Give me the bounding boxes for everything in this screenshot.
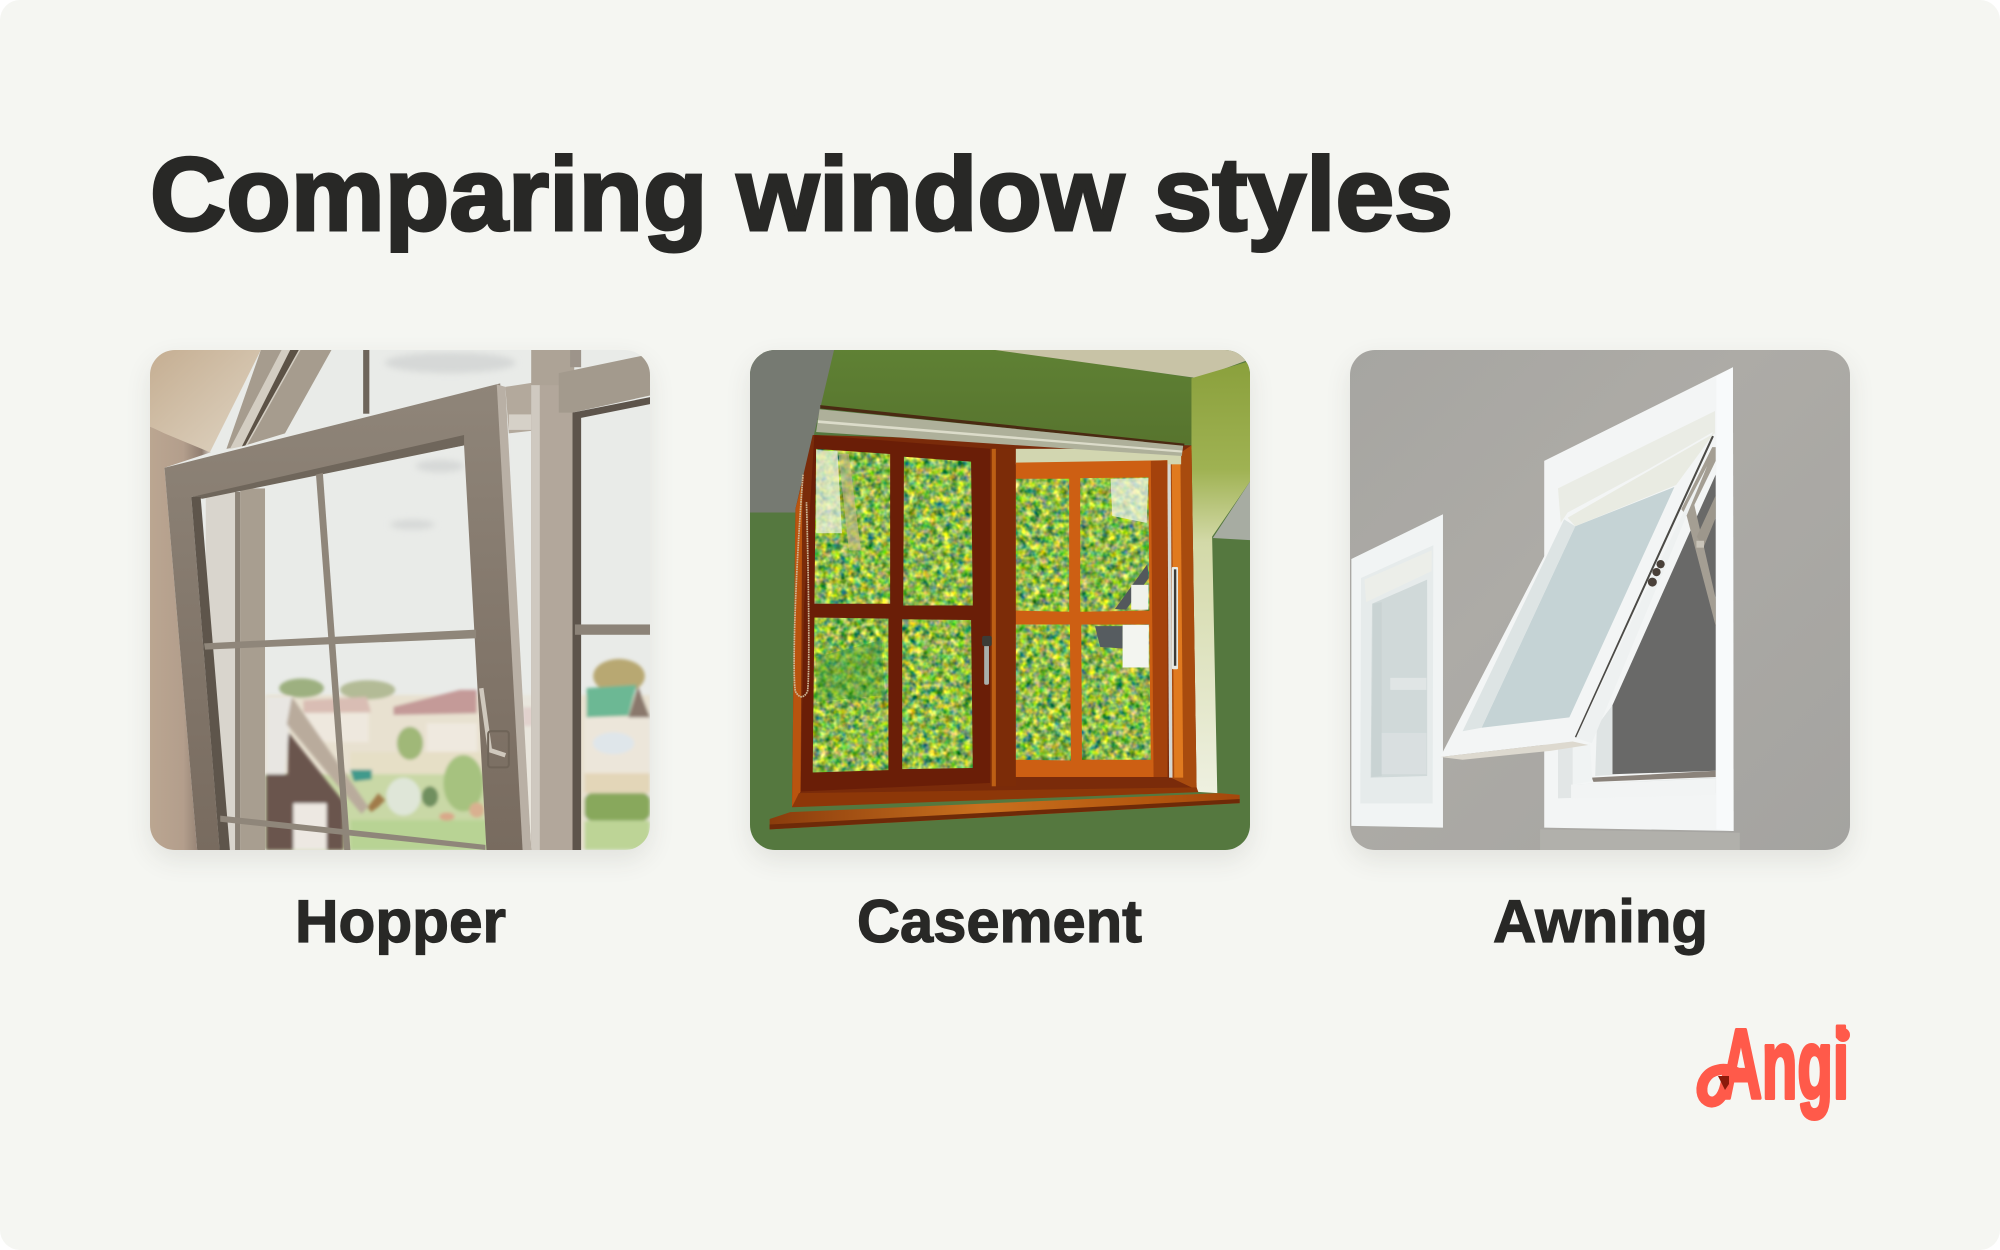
label: Casement: Casement	[857, 890, 1142, 955]
outer frame	[792, 435, 1197, 807]
panel: casement window photo	[750, 350, 1250, 850]
title: Comparing window styles	[150, 137, 1453, 253]
panel: awning window photo	[1350, 350, 1850, 850]
green wall	[750, 350, 1250, 850]
window sills	[770, 787, 1240, 829]
ceiling and wall	[150, 350, 261, 850]
lower wall band	[1540, 829, 1740, 850]
large window outer frame	[1544, 367, 1734, 831]
upper mullion	[363, 350, 369, 414]
green beam above window	[820, 350, 1199, 445]
left sash frame	[801, 435, 992, 791]
background post seen through glass	[206, 488, 265, 850]
panel: hopper window photo	[150, 350, 650, 850]
grey soffits	[750, 350, 1250, 540]
sky	[150, 350, 650, 850]
centre mullion	[990, 449, 1016, 786]
label: Awning: Awning	[1493, 890, 1708, 955]
fixed frame	[505, 350, 650, 850]
grey wall	[1350, 350, 1850, 850]
lower sill and reveal	[1571, 705, 1716, 798]
blind cord	[794, 475, 809, 697]
roller blind	[816, 405, 1185, 456]
right sash frame	[1016, 449, 1181, 777]
foliage panes	[813, 449, 1151, 773]
stay arm	[1681, 447, 1716, 626]
glazing bars	[204, 473, 485, 850]
open sash	[1440, 432, 1714, 760]
view details through panes	[816, 450, 1149, 702]
roof window beam	[226, 350, 331, 449]
tilted sash	[164, 383, 531, 850]
open sash side	[1575, 436, 1713, 743]
label: Hopper: Hopper	[295, 890, 506, 955]
right wall	[1191, 361, 1250, 793]
dark opening	[1612, 475, 1716, 774]
village scene	[265, 659, 650, 851]
handle	[481, 688, 509, 767]
cloud	[385, 352, 516, 529]
ceiling	[995, 350, 1250, 378]
brown house	[266, 697, 385, 850]
small closed window	[1351, 514, 1443, 828]
handles	[982, 567, 1178, 685]
